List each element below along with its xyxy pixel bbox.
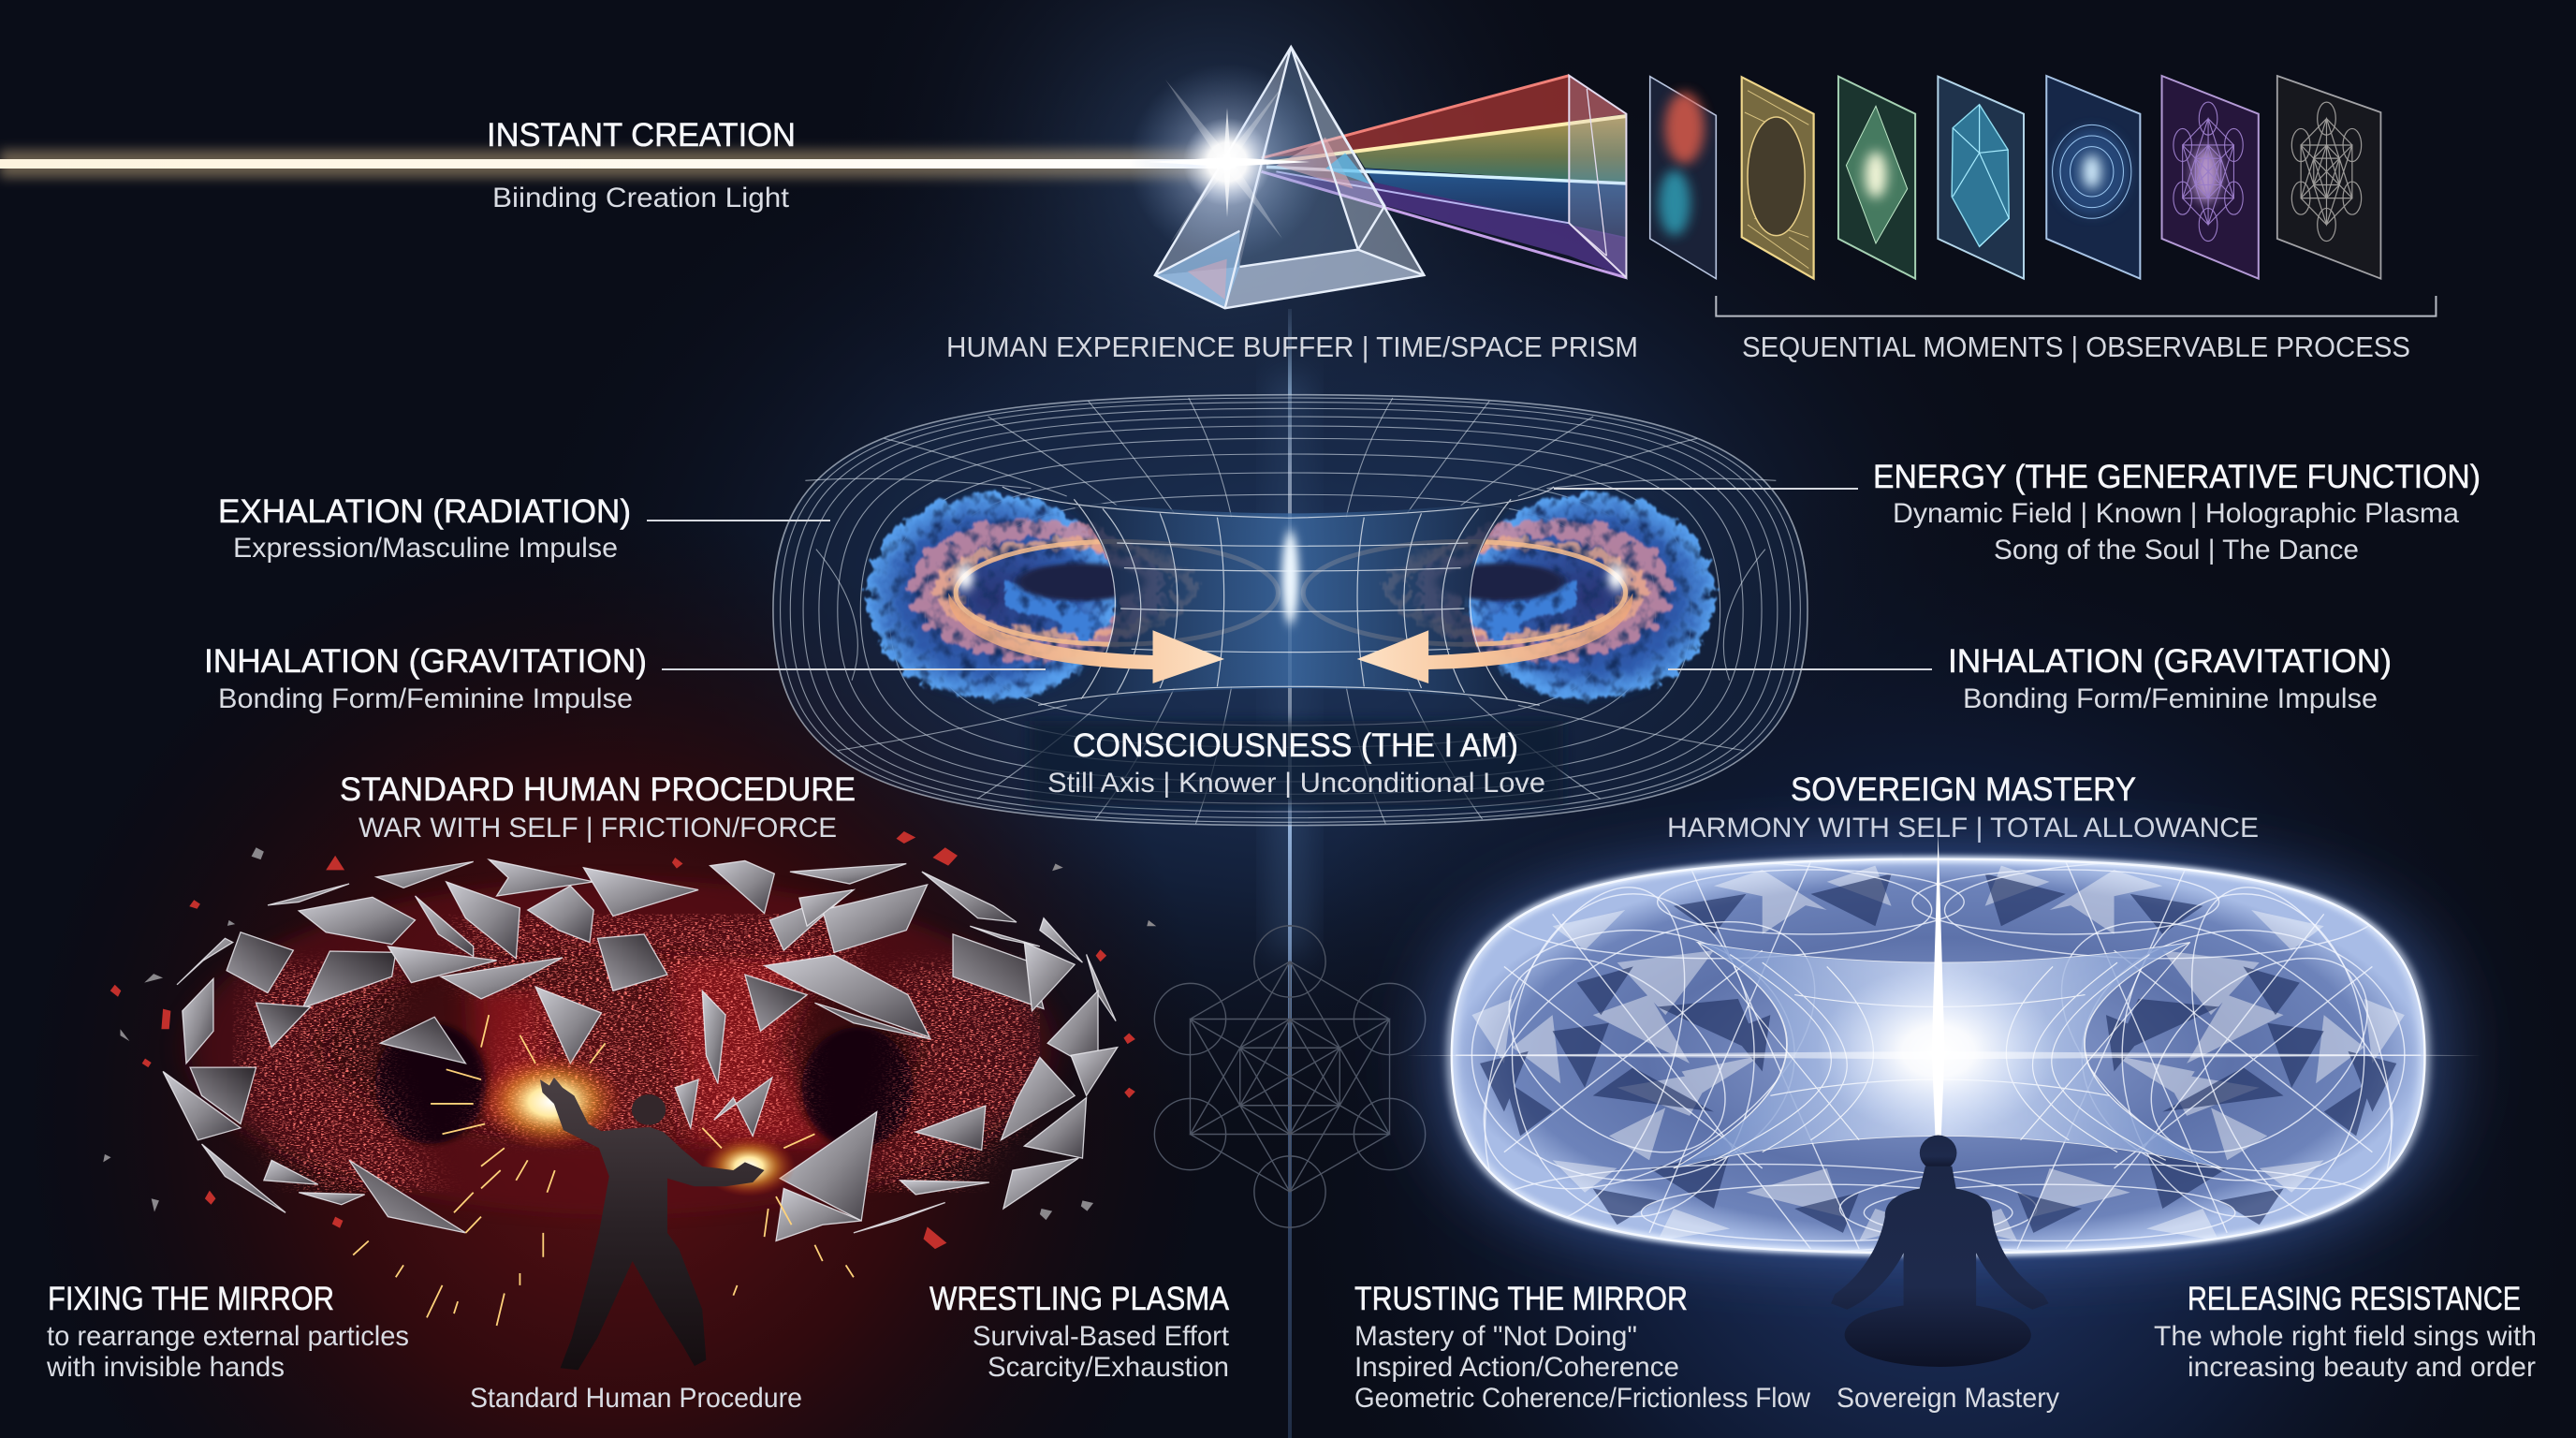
label: consciousness: CONSCIOUSNESS (THE I AM) [1073, 727, 1518, 764]
panel 7: grey cube [2277, 76, 2380, 279]
neck wireframe [1003, 487, 1554, 705]
flying chips [110, 831, 1135, 1249]
panel 1: colour haze [1650, 77, 1716, 279]
plasma left [866, 493, 1278, 699]
label: consciousness: Still Axis | Knower | Unconditional Love [1047, 768, 1545, 799]
text block: fixing the mirror: with invisible hands [46, 1352, 285, 1383]
label: energy [1554, 459, 2481, 565]
panel 2: gold [1742, 77, 1814, 279]
text block: trusting the mirror: Geometric Coherence/Frictionless Flow [1354, 1383, 1810, 1414]
label: inhalation right: Bonding Form/Feminine Impulse [1963, 683, 2378, 714]
text block: releasing resistance: increasing beauty and order [2188, 1352, 2536, 1383]
panel 6: violet cube [2162, 76, 2259, 279]
sequential moment panels [1650, 76, 2380, 279]
red energy field [233, 914, 1040, 1193]
heading: sovereign mastery [1667, 771, 2259, 844]
instant creation heading [487, 117, 796, 213]
torus rim glow [1452, 859, 2424, 1253]
spark streaks [353, 1015, 854, 1326]
right facets [1839, 861, 2460, 1253]
shattered red torus [103, 831, 1156, 1370]
label: exhalation left [218, 493, 830, 564]
label: energy: Song of the Soul | The Dance [1994, 535, 2359, 565]
text block: trusting the mirror: Inspired Action/Coherence [1354, 1352, 1679, 1383]
instant creation heading: Biinding Creation Light [492, 183, 790, 213]
prism [1155, 47, 1424, 308]
left facets [1416, 861, 2037, 1253]
inflow arrow right [1357, 593, 1632, 683]
label: exhalation left: Expression/Masculine Impulse [233, 533, 618, 564]
text block: wrestling plasma: Scarcity/Exhaustion [988, 1352, 1229, 1383]
caption: sovereign mastery: Sovereign Mastery [1837, 1383, 2059, 1414]
caption: standard human procedure: Standard Human Procedure [470, 1383, 802, 1414]
heading: standard human procedure [340, 771, 856, 844]
heading: standard human procedure: STANDARD HUMAN PROCEDURE [340, 771, 856, 808]
wireframe rings [773, 395, 1808, 826]
wireframe meridians [805, 398, 1776, 824]
label: consciousness [1047, 727, 1545, 799]
light beam [0, 150, 1236, 178]
heading: standard human procedure: WAR WITH SELF | FRICTION/FORCE [359, 813, 837, 844]
crystalline blue torus [1407, 833, 2481, 1367]
figure: meditating person [1831, 1136, 2049, 1367]
panel 3: green [1838, 77, 1915, 279]
light flash at prism [1129, 64, 1325, 260]
luminous neck [1674, 943, 2222, 1168]
label: exhalation left: EXHALATION (RADIATION) [218, 493, 631, 530]
text block: trusting the mirror: Mastery of "Not Doing" [1354, 1321, 1637, 1352]
rainbow fan [1262, 76, 1626, 278]
figure: standing man [540, 1078, 765, 1370]
text block: fixing the mirror: FIXING THE MIRROR [48, 1281, 334, 1317]
outer glow [1434, 855, 2442, 1258]
torus neck [1067, 499, 1518, 702]
torus rim [1452, 859, 2424, 1253]
label backdrop: consciousness [1030, 721, 1563, 805]
label: inhalation left [204, 643, 1046, 714]
label: inhalation left: Bonding Form/Feminine Impulse [218, 683, 633, 714]
panel 5: blue spiral [2046, 76, 2140, 279]
central metatron geometry [1154, 926, 1426, 1227]
text block: wrestling plasma: WRESTLING PLASMA [929, 1281, 1230, 1317]
panel 4: cyan [1938, 77, 2024, 279]
central torus [773, 395, 1808, 826]
bracket [1716, 296, 2436, 316]
heading: sovereign mastery: HARMONY WITH SELF | TOTAL ALLOWANCE [1667, 813, 2259, 844]
plasma right [1303, 493, 1715, 699]
neck mesh [1698, 943, 2190, 1160]
spark glows [477, 1053, 796, 1196]
text block: trusting the mirror: TRUSTING THE MIRROR [1354, 1281, 1688, 1317]
axis glow [1281, 531, 1299, 624]
text block: releasing resistance: The whole right field sings with [2154, 1321, 2537, 1352]
instant creation heading: INSTANT CREATION [487, 117, 796, 154]
inflow arrow left [948, 593, 1224, 683]
label: energy: ENERGY (THE GENERATIVE FUNCTION) [1873, 459, 2481, 495]
label: inhalation right [1668, 643, 2392, 714]
central vertical axis [1273, 309, 1307, 1438]
grey chips [103, 847, 1156, 1220]
heading: sovereign mastery: SOVEREIGN MASTERY [1791, 771, 2136, 808]
central light [1817, 966, 2059, 1136]
label: inhalation right: INHALATION (GRAVITATION) [1948, 643, 2392, 680]
text block: wrestling plasma: Survival-Based Effort [973, 1321, 1230, 1352]
torus body [1452, 859, 2424, 1253]
light spikes [1407, 833, 2481, 1209]
text block: wrestling plasma [929, 1281, 1230, 1383]
sequence caption: SEQUENTIAL MOMENTS | OBSERVABLE PROCESS [1742, 330, 2410, 363]
prism caption: HUMAN EXPERIENCE BUFFER | TIME/SPACE PRISM [946, 330, 1638, 363]
label: energy: Dynamic Field | Known | Holographic Plasma [1893, 498, 2459, 529]
text block: trusting the mirror [1354, 1281, 1810, 1414]
text block: fixing the mirror: to rearrange external particles [47, 1321, 409, 1352]
glass shards [163, 859, 1118, 1240]
label: inhalation left: INHALATION (GRAVITATION) [204, 643, 647, 680]
text block: releasing resistance [2154, 1281, 2537, 1383]
clipped facet mesh [1416, 861, 2460, 1253]
text block: fixing the mirror [46, 1281, 409, 1383]
